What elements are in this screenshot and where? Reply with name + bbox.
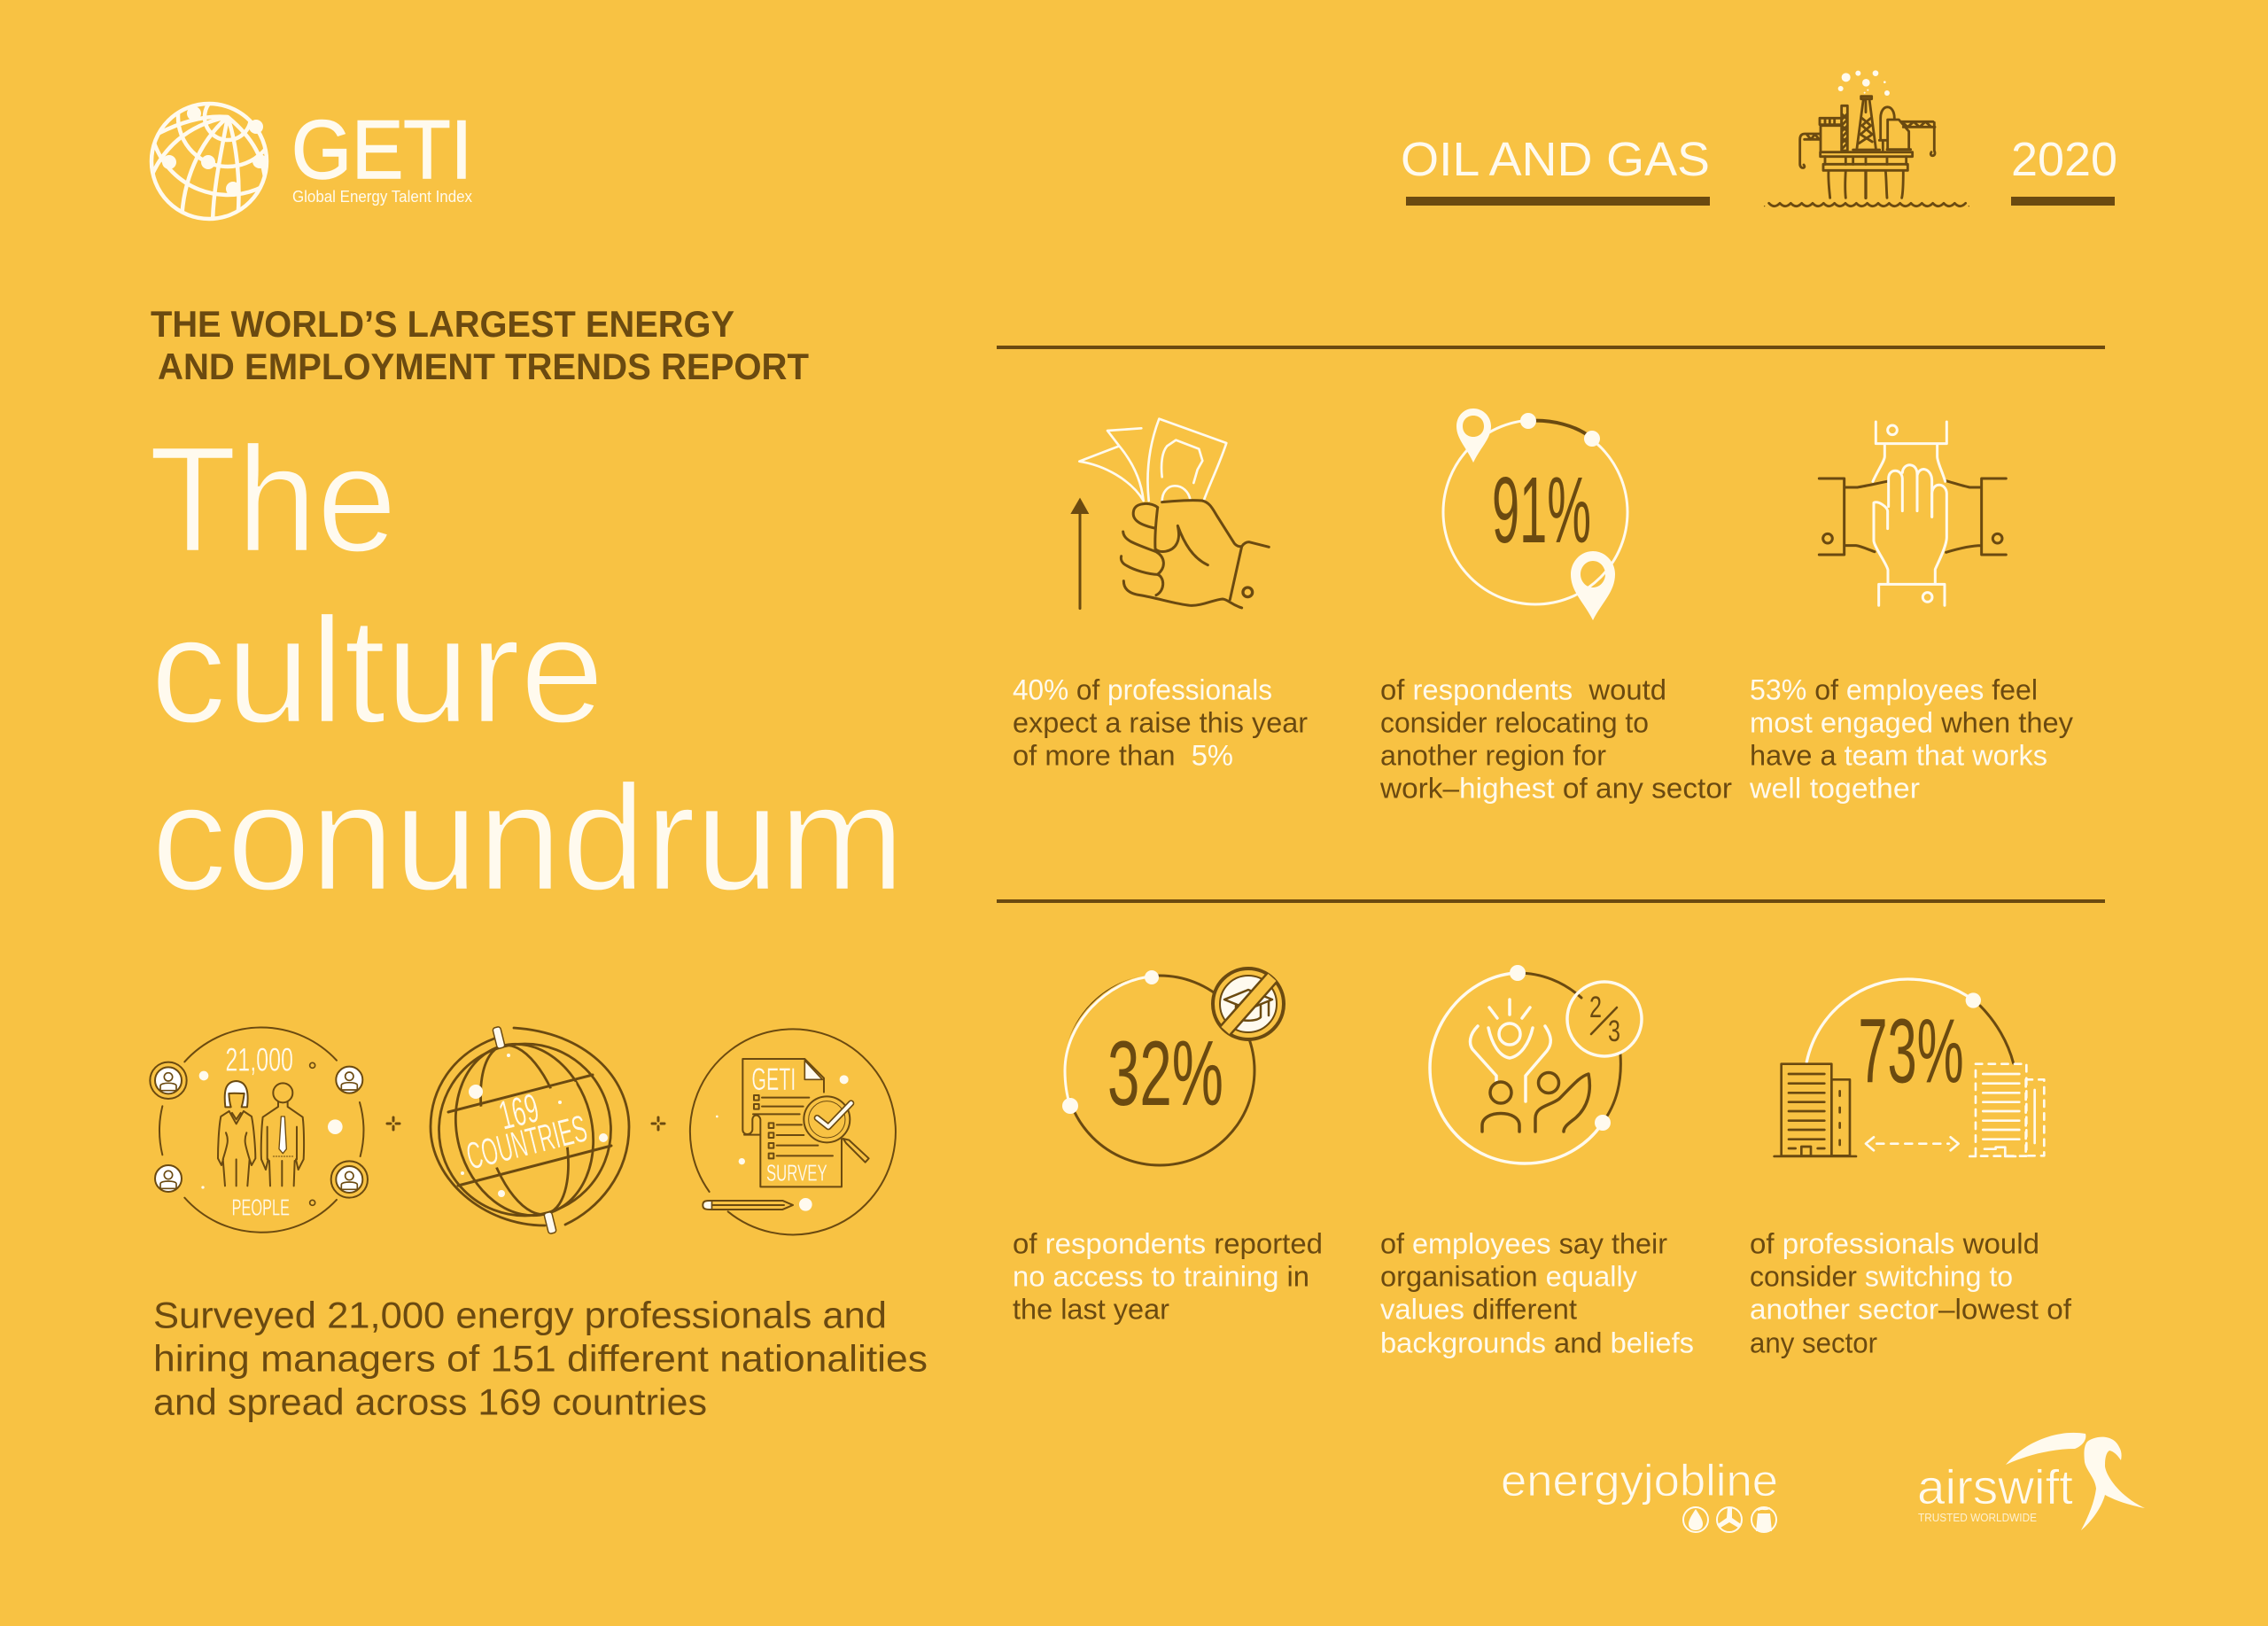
GETI logo — [149, 101, 472, 222]
energyjobline logo — [1501, 1456, 1778, 1532]
survey summary text: and spread across 169 countries — [153, 1381, 707, 1423]
icon: wire globe — [149, 101, 269, 222]
survey summary text: hiring managers of 151 different nationalities — [153, 1338, 928, 1379]
infographic canvas — [149, 70, 2145, 1533]
icon: fist with money and arrow — [1070, 419, 1269, 609]
stat panel: 73% switching sector — [1750, 979, 2071, 1359]
stat panel: 91% relocating — [1379, 408, 1732, 805]
icon: circle with people and two thirds: 2 — [1589, 991, 1602, 1024]
icon: stacked hands — [1819, 422, 2006, 605]
stat text: of respondents reported — [1013, 1228, 1323, 1260]
stat text — [1013, 1228, 1323, 1326]
stat panel: 53% team — [1749, 422, 2073, 805]
icon: swift bird — [2006, 1433, 2145, 1530]
stat text: backgrounds and beliefs — [1380, 1327, 1694, 1359]
stat text: another region for — [1380, 739, 1606, 771]
stat text: of employees say their — [1380, 1228, 1667, 1260]
report heading: THE WORLD’S LARGEST ENERGY — [151, 303, 734, 345]
energyjobline logo: energyjobline — [1501, 1456, 1778, 1505]
stat text: well together — [1749, 773, 1920, 805]
stat panel: two thirds equal values — [1380, 965, 1694, 1359]
survey summary text: Surveyed 21,000 energy professionals and — [153, 1294, 887, 1336]
stat panel: 40% raise — [1013, 419, 1308, 771]
icon: GETI survey — [690, 1029, 896, 1234]
woman — [218, 1081, 255, 1186]
main title — [149, 416, 905, 922]
main title: culture — [151, 587, 604, 755]
stat text: of more than 5% — [1013, 739, 1233, 771]
avatar bottom left — [155, 1165, 182, 1192]
header: oil and gas label: OIL AND GAS — [1401, 133, 1710, 186]
stat text: any sector — [1750, 1327, 1877, 1359]
stat text: organisation equally — [1380, 1260, 1637, 1292]
middle divider — [997, 899, 2105, 903]
man — [261, 1083, 304, 1186]
stat text: most engaged when they — [1750, 707, 2073, 739]
stat text — [1379, 673, 1732, 805]
airswift logo — [1917, 1433, 2145, 1530]
stat text: consider relocating to — [1380, 707, 1649, 739]
icon: circle with map pins and 91%: 91% — [1492, 458, 1591, 563]
icon: GETI survey: GETI — [751, 1062, 796, 1097]
report heading — [151, 303, 809, 387]
icon: 169 countries globe: COUNTRIES — [462, 1108, 591, 1179]
avatar bottom right — [336, 1166, 362, 1193]
airswift logo: airswift — [1917, 1459, 2073, 1514]
top divider — [997, 346, 2105, 349]
icon: offshore oil platform — [1764, 70, 1969, 206]
pencil — [703, 1201, 793, 1210]
logo wordmark: GETI — [291, 103, 472, 196]
icon: buildings with arc and 73% — [1775, 979, 2044, 1156]
icon: circle with no-training badge and 32% — [1062, 969, 1284, 1165]
plus sign — [652, 1117, 664, 1130]
stat text: work–highest of any sector — [1379, 773, 1732, 805]
stat text — [1749, 673, 2073, 805]
icons: energy sectors — [1683, 1507, 1776, 1532]
stat text: the last year — [1013, 1294, 1169, 1326]
icon: 21,000 people — [150, 1028, 368, 1233]
stat text — [1750, 1228, 2071, 1359]
stat panel: 32% no training — [1013, 969, 1323, 1326]
stat text — [1380, 1228, 1694, 1359]
icon: 169 countries globe — [431, 1026, 629, 1234]
avatar top left — [155, 1067, 182, 1093]
stat text: another sector –lowest of — [1750, 1294, 2071, 1326]
stat text: 53% of employees feel — [1750, 673, 2038, 705]
icon: circle with map pins and 91% — [1443, 408, 1627, 620]
icon: buildings with arc and 73%: 73% — [1858, 1000, 1964, 1102]
stat text: consider switching to — [1750, 1260, 2013, 1292]
stat text: have a team that works — [1750, 739, 2047, 771]
logo tagline: Global Energy Talent Index — [292, 188, 472, 206]
stat text: of respondents woutd — [1380, 673, 1666, 705]
stat text: expect a raise this year — [1013, 707, 1308, 739]
report heading: AND EMPLOYMENT TRENDS REPORT — [158, 346, 809, 387]
plus sign — [387, 1117, 400, 1130]
stat text — [1013, 673, 1308, 771]
icon: circle with people and two thirds — [1430, 965, 1642, 1163]
header: year label: 2020 — [2011, 133, 2117, 186]
survey summary text — [153, 1294, 928, 1423]
main title: conundrum — [151, 754, 905, 922]
stat text: of professionals would — [1750, 1228, 2039, 1260]
stat text: no access to training in — [1013, 1260, 1309, 1292]
stat text: values different — [1380, 1294, 1577, 1326]
icon: 169 countries globe: 169 — [494, 1085, 543, 1139]
avatar top right — [336, 1067, 362, 1093]
icon: circle with people and two thirds: 3 — [1608, 1015, 1620, 1048]
stat text: 40% of professionals — [1013, 673, 1272, 705]
icon: circle with no-training badge and 32%: 32% — [1107, 1023, 1223, 1125]
icon: GETI survey: SURVEY — [766, 1160, 827, 1186]
airswift logo: TRUSTED WORLDWIDE — [1918, 1511, 2037, 1524]
icon: 21,000 people: 21,000 — [225, 1040, 293, 1078]
main title: The — [149, 416, 397, 584]
icon: 21,000 people: PEOPLE — [232, 1194, 290, 1221]
